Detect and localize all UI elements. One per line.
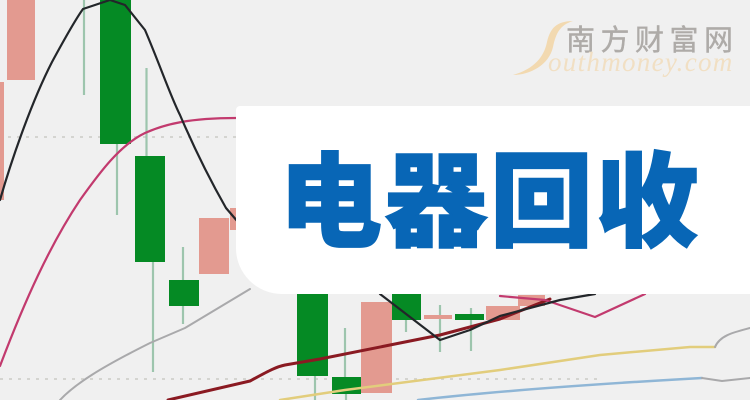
watermark logo [513, 17, 739, 77]
logo domain: outhmoney.com [548, 47, 734, 77]
dark red average [168, 299, 550, 400]
dotted price guide lines [0, 137, 600, 379]
title: 电器回收 [279, 119, 701, 268]
blue average [418, 378, 702, 400]
green candles [100, 0, 484, 394]
candle wicks [84, 0, 471, 400]
logo Chinese name: 南方财富网 [566, 17, 739, 59]
title panel [236, 106, 750, 294]
red candles [0, 0, 545, 393]
yellow average [280, 347, 715, 400]
logo swoosh [513, 21, 573, 75]
pink average [0, 118, 645, 366]
black average [0, 0, 595, 340]
grey tail lines [60, 289, 750, 400]
